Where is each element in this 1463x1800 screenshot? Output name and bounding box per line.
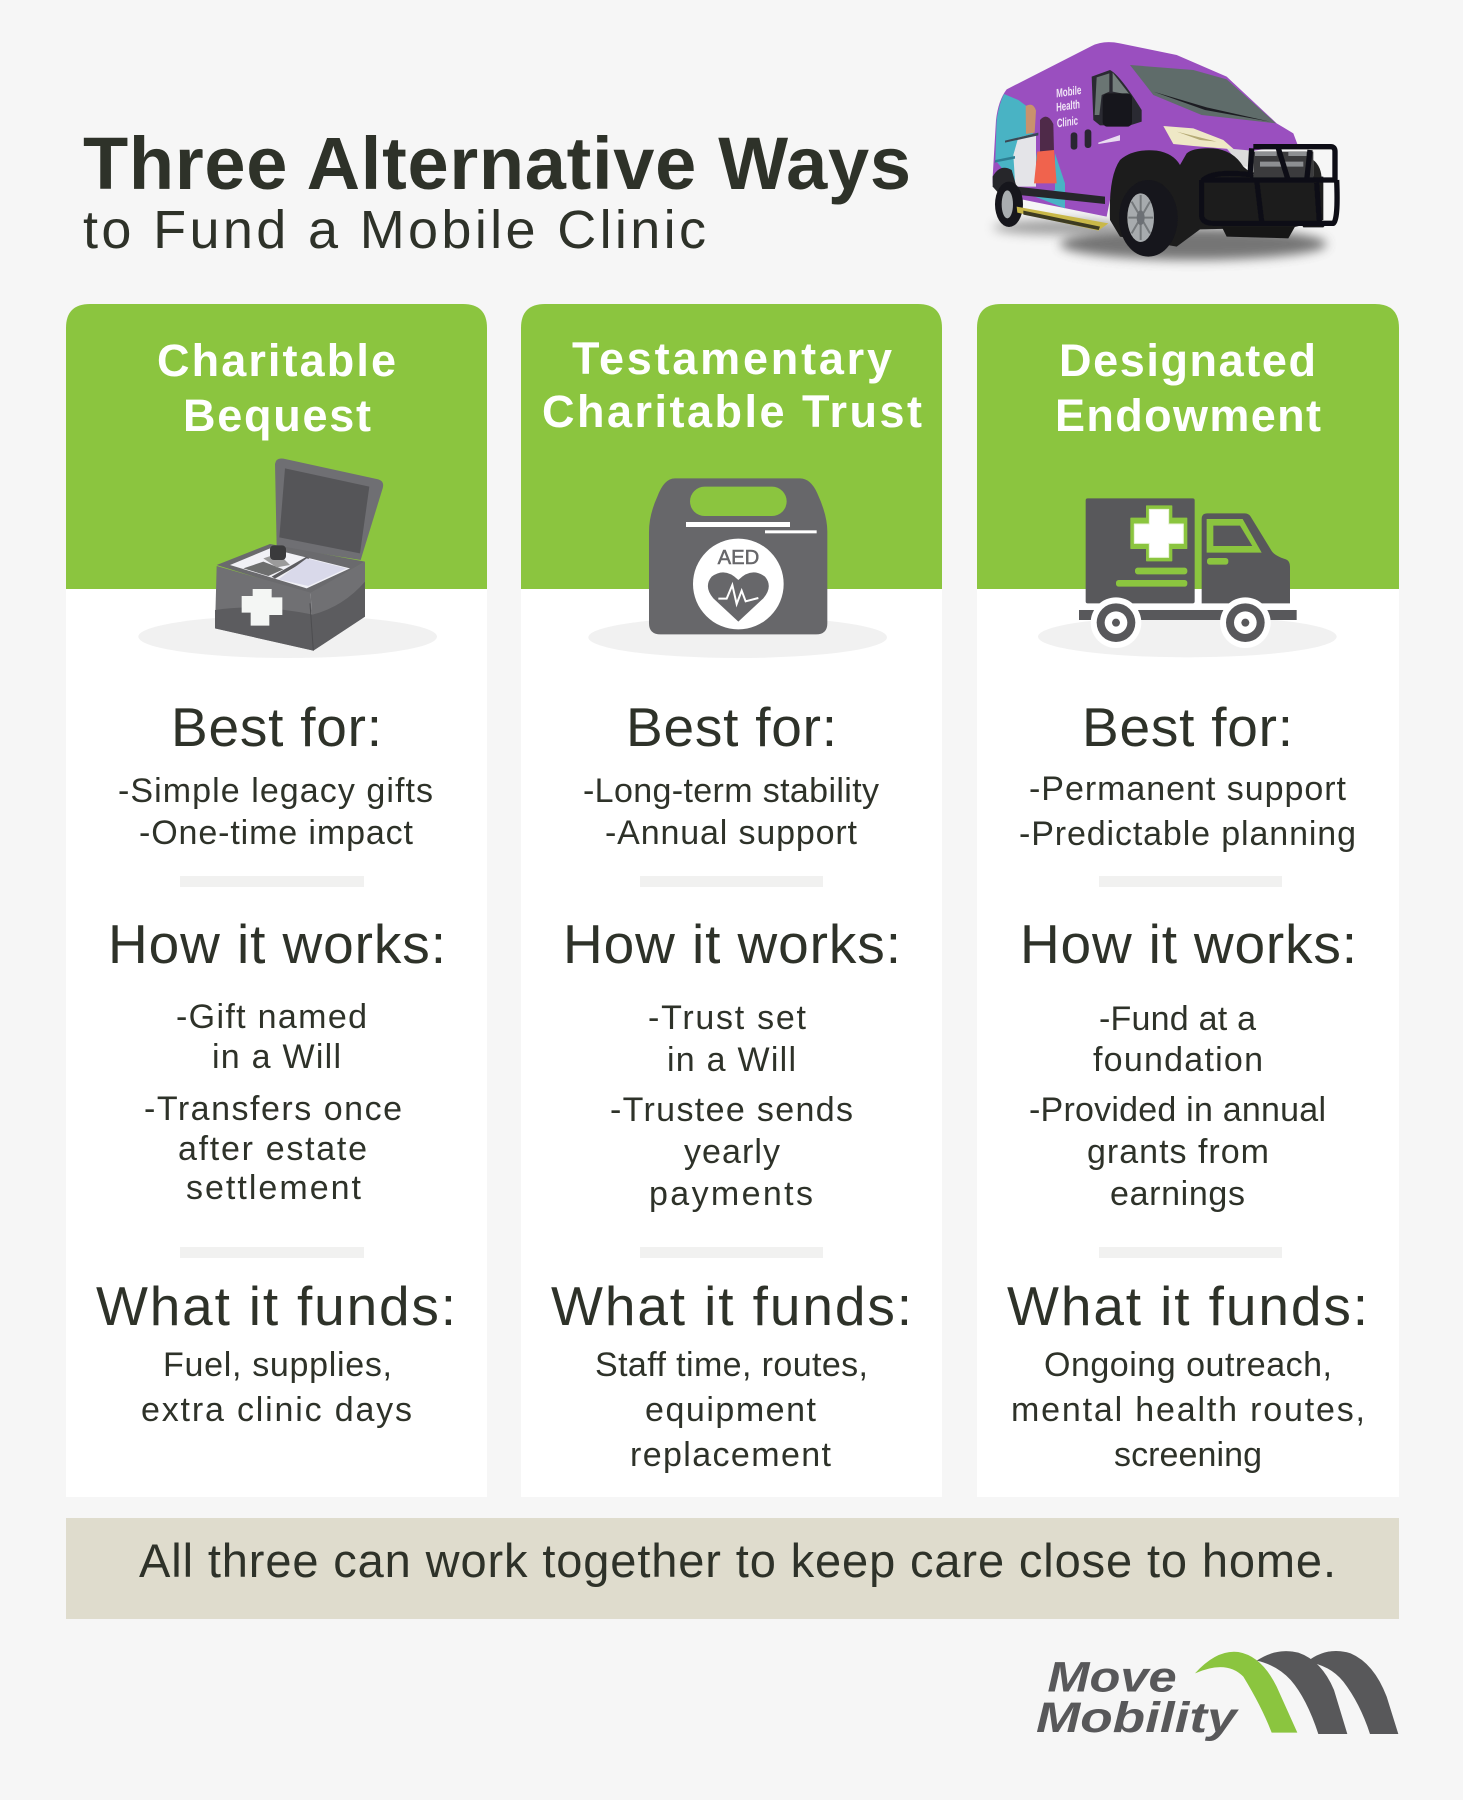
- section: how it works: How it works:: [1020, 913, 1357, 975]
- section: how it works: [563, 913, 901, 1213]
- section: what it funds: Ongoing outreach,: [1044, 1346, 1332, 1384]
- section: best for: -One-time impact: [139, 814, 414, 852]
- section: how it works: How it works:: [108, 913, 446, 975]
- section: best for: -Long-term stability: [583, 772, 879, 810]
- section: best for: Best for:: [1082, 696, 1293, 758]
- heading: Charitable Bequest: Bequest: [183, 390, 371, 441]
- section: how it works: in a Will: [667, 1041, 796, 1079]
- section: how it works: foundation: [1093, 1041, 1263, 1079]
- heading: Testamentary Charitable Trust: Charitable Trust: [542, 386, 922, 437]
- heading: Designated Endowment: Designated: [1059, 335, 1316, 386]
- section: best for: -Permanent support: [1029, 770, 1347, 808]
- image: purple mobile health clinic van: Health: [1055, 97, 1081, 114]
- section: how it works: yearly: [684, 1133, 780, 1171]
- icon: AED case: [588, 478, 887, 658]
- callout banner: [66, 1518, 1399, 1619]
- section: best for: -Predictable planning: [1019, 815, 1356, 853]
- title: [83, 122, 911, 260]
- section: how it works: grants from: [1087, 1133, 1269, 1171]
- section: what it funds: screening: [1114, 1436, 1262, 1474]
- logo: Move Mobility: [1036, 1651, 1398, 1742]
- section: how it works: -Gift named: [176, 998, 367, 1036]
- heading: Charitable Bequest: [157, 335, 396, 441]
- callout banner: All three can work together to keep care close to home.: [139, 1534, 1336, 1587]
- section: what it funds: What it funds:: [551, 1275, 912, 1337]
- section: what it funds: mental health routes,: [1011, 1391, 1365, 1429]
- heading: Testamentary Charitable Trust: [542, 333, 922, 437]
- image: purple mobile health clinic van: [993, 42, 1337, 260]
- section: best for: [118, 696, 433, 852]
- section: what it funds: replacement: [630, 1436, 832, 1474]
- section: what it funds: [551, 1275, 912, 1474]
- heading: Designated Endowment: Endowment: [1055, 390, 1321, 441]
- section: how it works: [108, 913, 446, 1207]
- icon: AED case: AED: [718, 547, 759, 569]
- section: what it funds: Fuel, supplies,: [163, 1346, 392, 1384]
- heading: Testamentary Charitable Trust: Testamentary: [572, 333, 892, 384]
- section: what it funds: What it funds:: [96, 1275, 456, 1337]
- section: best for: Best for:: [171, 696, 382, 758]
- section: how it works: -Transfers once: [144, 1090, 402, 1128]
- section: best for: [1019, 696, 1356, 853]
- icon: first aid kit: [138, 458, 437, 658]
- title: Three Alternative Ways: [83, 122, 911, 205]
- section: best for: [583, 696, 879, 852]
- section: best for: -Simple legacy gifts: [118, 772, 433, 810]
- panel: Designated Endowment: [977, 304, 1399, 1497]
- section: what it funds: What it funds:: [1007, 1275, 1368, 1337]
- section: what it funds: [1007, 1275, 1368, 1474]
- section: best for: -Annual support: [605, 814, 858, 852]
- section: how it works: -Trust set: [648, 999, 807, 1037]
- section: what it funds: [96, 1275, 456, 1429]
- section: how it works: settlement: [186, 1169, 362, 1207]
- section: how it works: in a Will: [212, 1038, 341, 1076]
- logo: Move Mobility: Move: [1047, 1653, 1177, 1701]
- section: how it works: -Trustee sends: [610, 1091, 853, 1129]
- heading: Charitable Bequest: Charitable: [157, 335, 396, 386]
- icon: medical truck: [1038, 498, 1337, 657]
- section: what it funds: extra clinic days: [141, 1391, 412, 1429]
- section: how it works: -Provided in annual: [1029, 1091, 1326, 1129]
- image: purple mobile health clinic van: Mobile: [1055, 83, 1082, 100]
- section: how it works: [1020, 913, 1357, 1213]
- section: best for: Best for:: [626, 696, 837, 758]
- logo: Move Mobility: Mobility: [1036, 1694, 1239, 1742]
- section: how it works: earnings: [1110, 1175, 1245, 1213]
- section: how it works: -Fund at a: [1099, 1000, 1256, 1038]
- section: what it funds: Staff time, routes,: [595, 1346, 868, 1384]
- title: to Fund a Mobile Clinic: [83, 200, 706, 260]
- panel: Charitable Bequest: [66, 304, 487, 1497]
- heading: Designated Endowment: [1055, 335, 1321, 441]
- image: purple mobile health clinic van: Clinic: [1056, 113, 1079, 130]
- panel: Testamentary Charitable Trust: [521, 304, 942, 1497]
- section: how it works: How it works:: [563, 913, 901, 975]
- section: how it works: after estate: [178, 1130, 367, 1168]
- section: what it funds: equipment: [645, 1391, 817, 1429]
- section: how it works: payments: [649, 1175, 813, 1213]
